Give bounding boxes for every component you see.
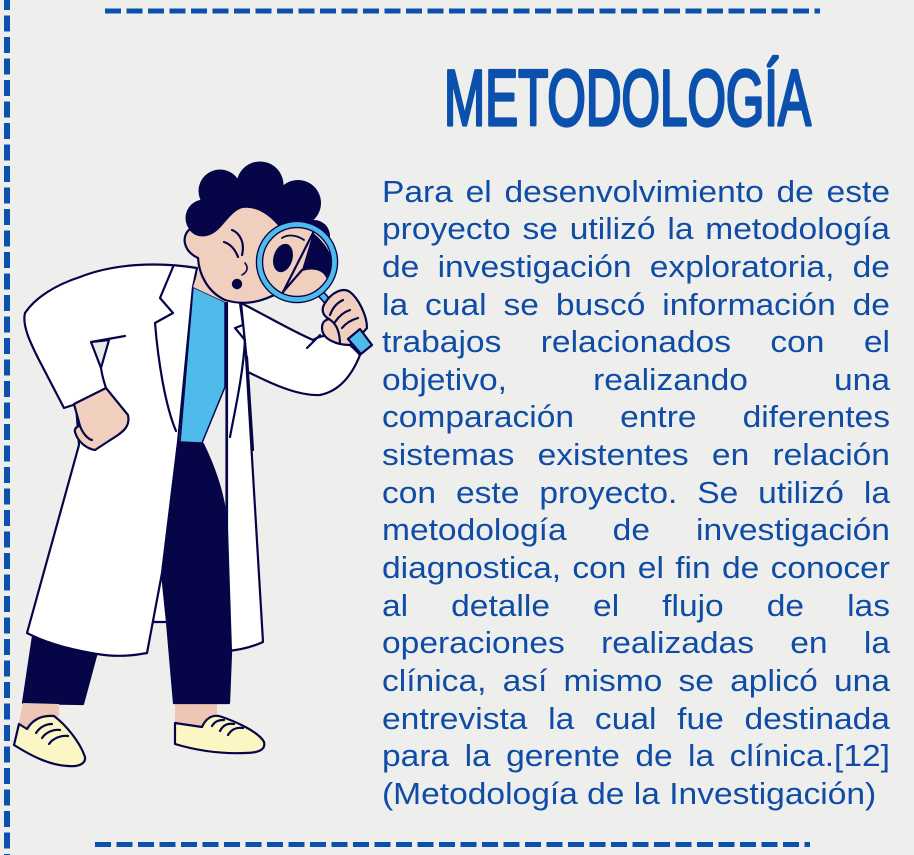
left ankle <box>18 703 59 730</box>
body text: la cual se buscó información de <box>382 288 890 322</box>
body text: (Metodología de la Investigación) <box>382 777 876 811</box>
gripping hand <box>322 290 367 345</box>
mouth <box>232 279 242 289</box>
body text: comparación entre diferentes <box>382 400 890 434</box>
left shoe <box>14 716 85 766</box>
body text: trabajos relacionados con el <box>382 325 890 359</box>
handle shaft <box>320 293 330 304</box>
body text: sistemas existentes en relación <box>382 438 890 472</box>
body text: objetivo, realizando una <box>382 363 890 397</box>
body text: metodología de investigación <box>382 513 890 547</box>
large eye <box>270 241 296 275</box>
magnifying glass <box>260 224 334 304</box>
coat lapels <box>155 267 253 450</box>
right shoe <box>175 716 264 753</box>
tie <box>180 287 225 443</box>
body text: Para el desenvolvimiento de este <box>382 175 890 209</box>
lens interior <box>261 226 333 298</box>
nose <box>242 263 247 275</box>
face <box>185 207 300 303</box>
body text: proyecto se utilizó la metodología <box>382 212 890 246</box>
body text: al detalle el flujo de las <box>382 589 890 623</box>
coat right panel <box>227 300 263 651</box>
body text: entrevista la cual fue destinada <box>382 702 890 736</box>
body text: diagnostica, con el fin de conocer <box>382 551 890 585</box>
illustration: scientist with magnifying glass <box>14 162 372 766</box>
body text: clínica, así mismo se aplicó una <box>382 664 890 698</box>
lens ring <box>260 224 334 300</box>
handle grip <box>348 329 372 354</box>
coat lining <box>153 450 177 622</box>
body text: operaciones realizadas en la <box>382 626 890 660</box>
body text: para la gerente de la clínica.[12] <box>382 739 890 773</box>
body text: de investigación exploratoria, de <box>382 250 890 284</box>
coat pocket <box>91 336 125 368</box>
right arm sleeve <box>241 303 360 395</box>
body text: con este proyecto. Se utilizó la <box>382 476 890 510</box>
sleeve fold <box>101 368 106 388</box>
right ankle <box>175 703 217 727</box>
neck <box>193 272 250 304</box>
collar line <box>225 300 228 650</box>
trousers <box>162 442 231 703</box>
left leg <box>23 636 97 704</box>
coat body <box>24 265 197 656</box>
hair <box>186 162 330 252</box>
body text <box>382 175 890 811</box>
left hand <box>74 388 128 450</box>
winking eye <box>224 230 243 257</box>
